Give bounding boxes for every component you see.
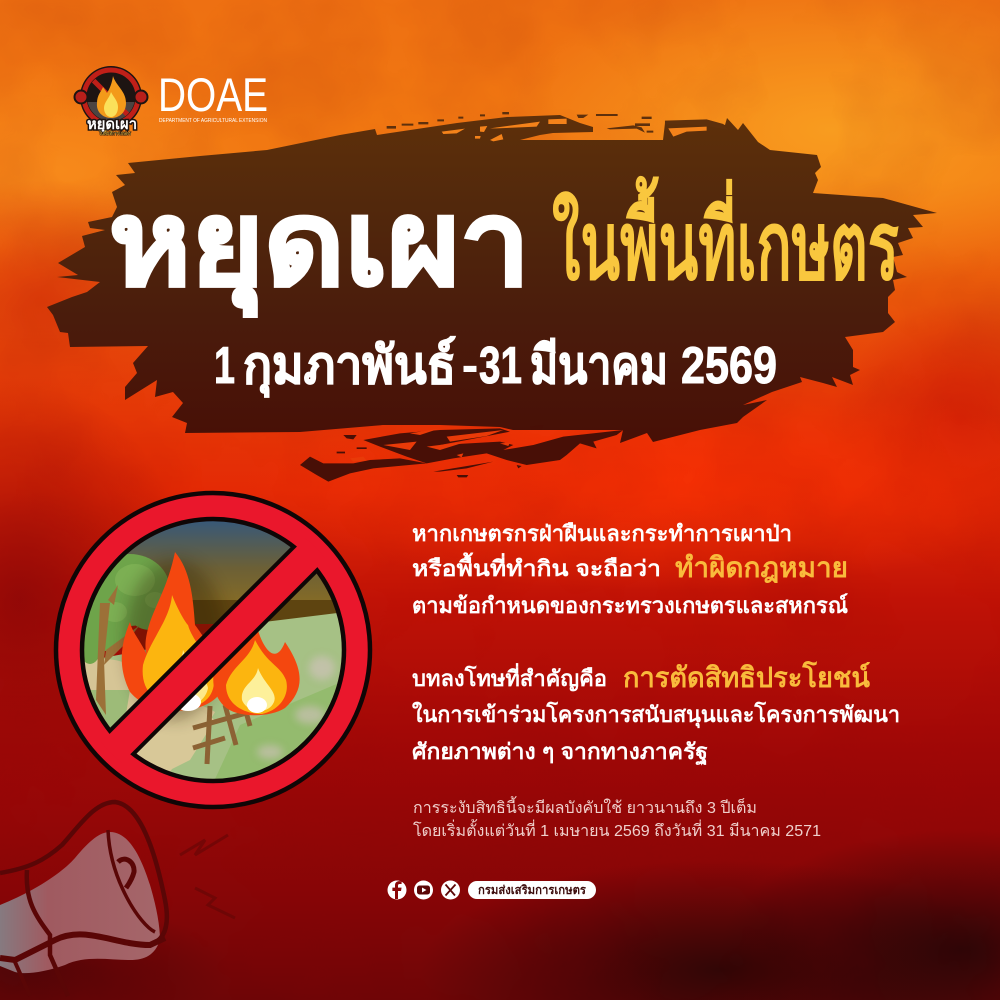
date range: – xyxy=(463,337,477,395)
text block: penalty: การตัดสิทธิประโยชน์ xyxy=(623,660,870,693)
icon: X xyxy=(441,880,460,900)
title: stop burning: หยุดเผา xyxy=(109,178,530,317)
date range: 31 xyxy=(479,337,522,395)
text block: violation xyxy=(412,521,848,618)
text block: violation: หรือพื้นที่ทำกิน จะถือว่า xyxy=(412,552,661,581)
date range: กุมภาพันธ์ xyxy=(243,336,456,398)
logo: stop burning badge: ในพื้นที่การเกษตร xyxy=(99,128,131,137)
icon: prohibited burning sign xyxy=(56,493,370,807)
social handle pill xyxy=(468,881,596,899)
brush stroke banner xyxy=(47,112,937,482)
logo: DOAE: DOAE xyxy=(158,68,268,121)
logo: stop burning badge: หยุดเผา xyxy=(87,116,137,134)
text block: penalty xyxy=(412,660,900,766)
text block: duration note xyxy=(413,796,821,840)
text block: penalty: ศักยภาพต่าง ๆ จากทางภาครัฐ xyxy=(412,739,708,766)
text block: violation: ตามข้อกำหนดของกระทรวงเกษตรและสหกรณ์ xyxy=(412,593,848,618)
text block: violation: หากเกษตรกรฝ่าฝืนและกระทำการเผาป่า xyxy=(412,521,792,546)
text block: penalty: ในการเข้าร่วมโครงการสนับสนุนและโครงการพัฒนา xyxy=(412,701,900,729)
icon: megaphone xyxy=(0,802,235,996)
text block: penalty: บทลงโทษที่สำคัญคือ xyxy=(412,662,607,692)
text block: duration note: โดยเริ่มตั้งแต่วันที่ 1 เมษายน 2569 ถึงวันที่ 31 มีนาคม 2571 xyxy=(413,819,821,840)
icon: youtube xyxy=(414,880,433,900)
social handle pill: กรมส่งเสริมการเกษตร xyxy=(478,883,587,897)
text block: violation: ทำผิดกฎหมาย xyxy=(675,552,848,584)
icon: facebook xyxy=(388,880,406,900)
date range xyxy=(214,336,777,398)
date range: มีนาคม xyxy=(530,337,668,395)
logo: stop burning badge xyxy=(74,66,148,137)
date range: 2569 xyxy=(681,337,777,395)
text block: duration note: การระงับสิทธินี้จะมีผลบังคับใช้ ยาวนานถึง 3 ปีเต็ม xyxy=(413,796,757,817)
date range: 1 xyxy=(214,337,235,395)
logo: DOAE: DEPARTMENT OF AGRICULTURAL EXTENSION xyxy=(159,118,267,124)
